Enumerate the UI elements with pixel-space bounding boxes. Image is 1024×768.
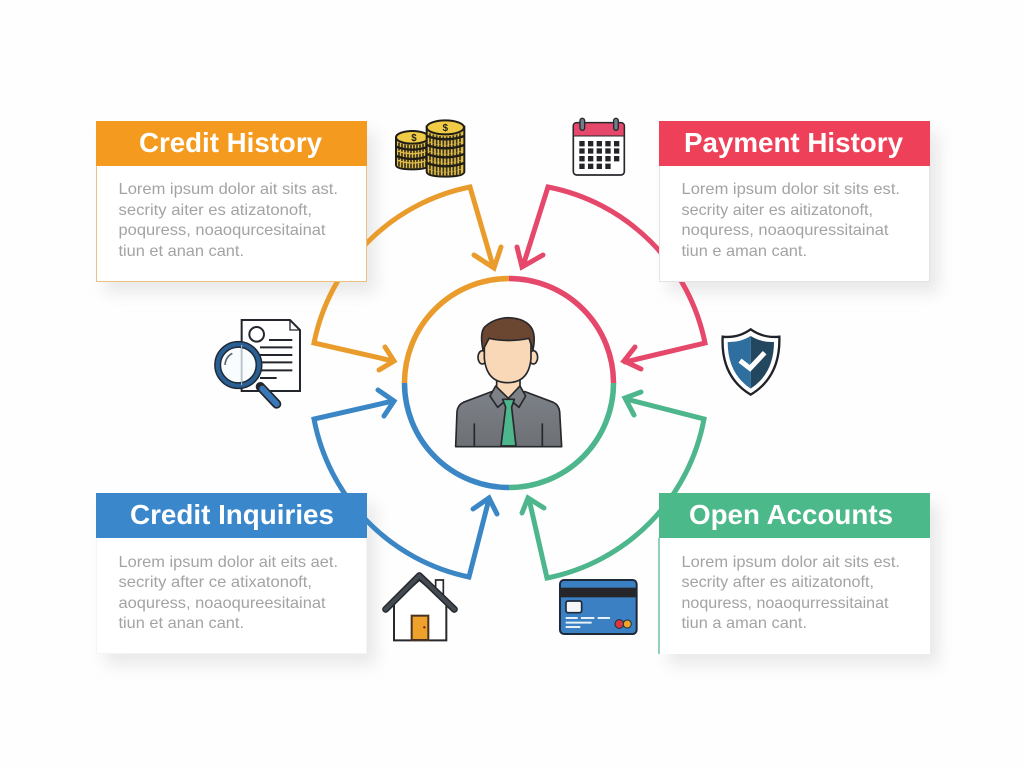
text block: payment history: secrity aiter es aitizatonoft,: [682, 202, 873, 219]
arrow: green connector: [522, 392, 704, 578]
text block: open accounts: secrity after es aitizatonoft,: [682, 574, 874, 591]
icon: credit card: [560, 580, 637, 634]
panel: credit inquiries: [96, 493, 367, 654]
icon: coin stacks: [396, 120, 464, 177]
text block: credit inquiries: Lorem ipsum dolor ait eits aet.: [118, 554, 338, 571]
text block: credit inquiries: secrity after ce atixatonoft,: [118, 574, 312, 591]
icon: person in suit: [456, 318, 562, 447]
icon: shield with check: [723, 329, 779, 395]
icon: calendar: [573, 118, 624, 175]
text block: open accounts: tiun a aman cant.: [682, 615, 807, 632]
text block: payment history: tiun e aman cant.: [682, 243, 807, 260]
text block: credit inquiries: [118, 554, 338, 632]
icon: coin stacks: $: [411, 133, 417, 144]
text block: credit inquiries: aoquress, noaoqureesitainat: [118, 595, 326, 612]
text block: open accounts: [682, 554, 900, 632]
panel: payment history: [659, 121, 930, 282]
panel: credit history: [96, 121, 367, 282]
text block: credit history: secrity aiter es atizatonoft,: [118, 202, 312, 219]
text block: credit history: Lorem ipsum dolor ait sits ast.: [118, 181, 338, 198]
header: credit history: [96, 121, 367, 166]
text block: credit inquiries: tiun et anan cant.: [118, 615, 244, 632]
heading: open accounts: Open Accounts: [689, 499, 893, 530]
header: open accounts: [659, 493, 930, 538]
heading: payment history: Payment History: [684, 127, 903, 158]
text block: payment history: Lorem ipsum dolor sit sits est.: [682, 181, 900, 198]
text block: payment history: [682, 181, 900, 260]
heading: credit history: Credit History: [139, 127, 322, 158]
text block: open accounts: noquress, noaoqurressitainat: [682, 595, 889, 612]
text block: credit history: tiun et anan cant.: [118, 243, 244, 260]
arrow: blue connector: [314, 390, 497, 577]
header: payment history: [659, 121, 930, 166]
text block: open accounts: Lorem ipsum dolor ait sits est.: [682, 554, 900, 571]
icon: house: [386, 576, 454, 640]
panel: open accounts: [659, 493, 930, 654]
central ring: [404, 278, 614, 488]
header: credit inquiries: [96, 493, 367, 538]
arrow: red connector: [517, 187, 705, 369]
text block: payment history: noquress, noaoquressitainat: [682, 222, 889, 239]
icon: coin stacks: $: [443, 123, 449, 134]
icon: document with magnifier: [218, 320, 300, 404]
text block: credit history: poquress, noaoqurcesitainat: [118, 222, 326, 239]
text block: credit history: [118, 181, 338, 260]
heading: credit inquiries: Credit Inquiries: [130, 499, 334, 530]
arrow: orange connector: [314, 187, 501, 370]
